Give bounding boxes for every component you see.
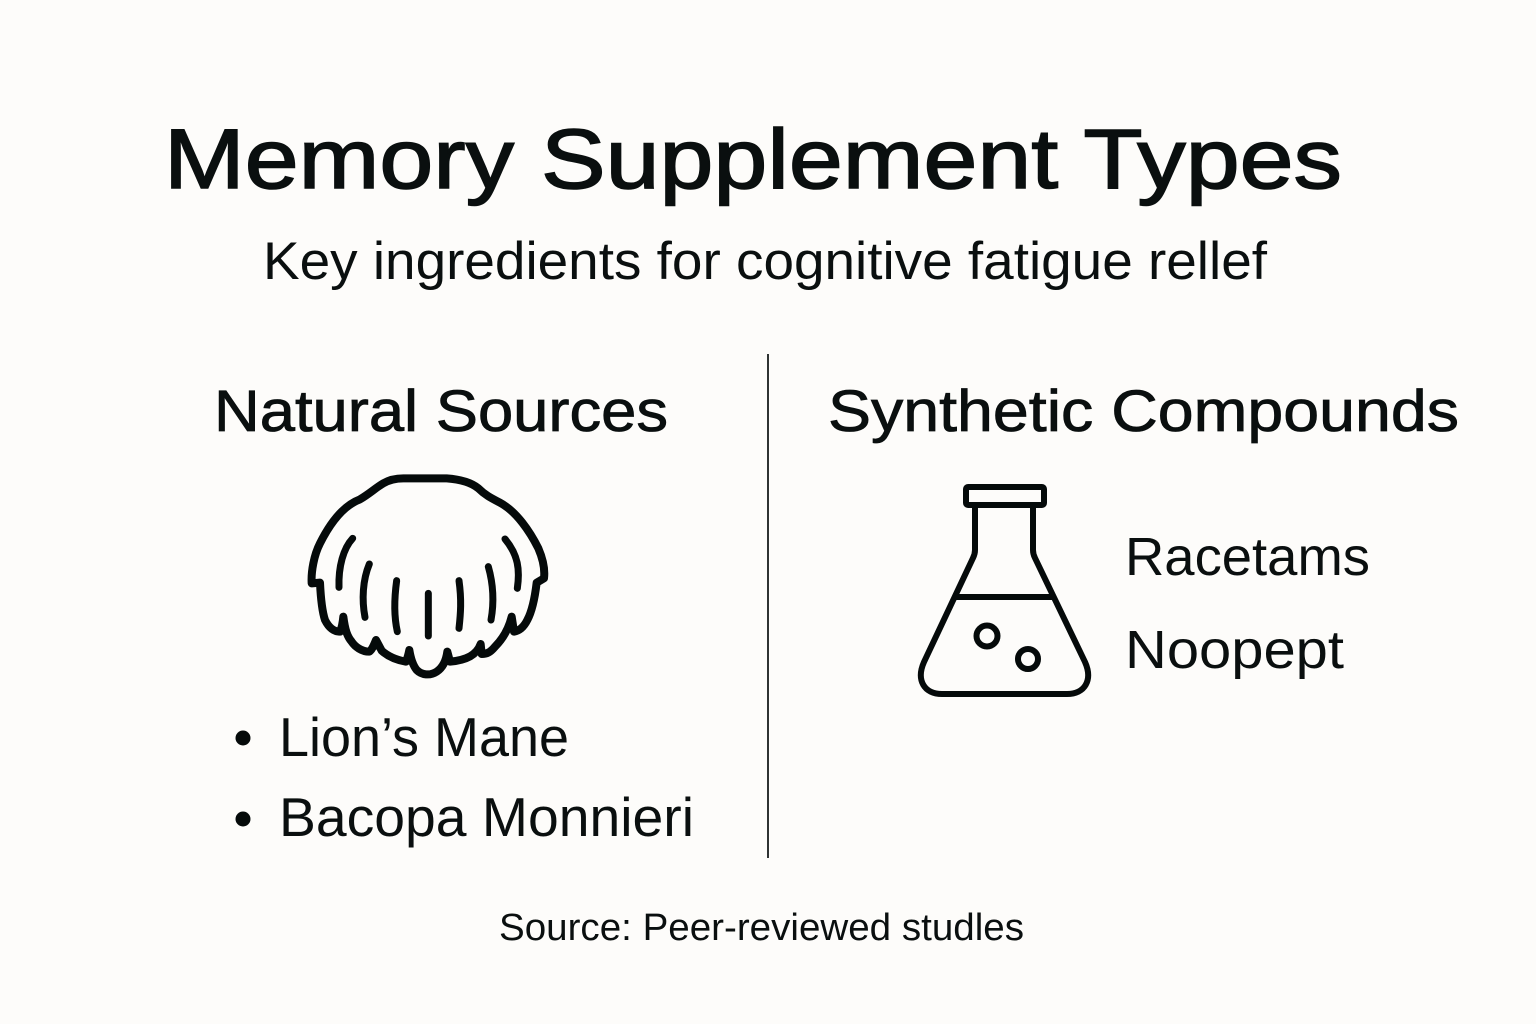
list: racetams: Racetams	[1125, 527, 1370, 587]
list: noopept: Noopept	[1125, 620, 1344, 680]
heading: natural sources: Natural Sources	[214, 379, 668, 444]
list item: bacopa monnieri: Bacopa Monnieri	[279, 786, 694, 848]
icon: shell	[312, 478, 544, 674]
list item: lion's mane: Lion’s Mane	[279, 706, 569, 768]
bullet list: natural ingredients	[236, 706, 694, 848]
subtitle: Key ingredients for cognitive fatigue rellef	[263, 232, 1267, 291]
title: Memory Supplement Types	[164, 112, 1342, 206]
icon: flask	[921, 487, 1088, 694]
heading: synthetic compounds: Synthetic Compounds	[828, 379, 1459, 444]
panel: synthetic compounds	[828, 379, 1459, 694]
source note: Source: Peer-reviewed studles	[499, 907, 1024, 949]
panel: natural sources	[214, 379, 694, 848]
divider	[767, 354, 769, 858]
